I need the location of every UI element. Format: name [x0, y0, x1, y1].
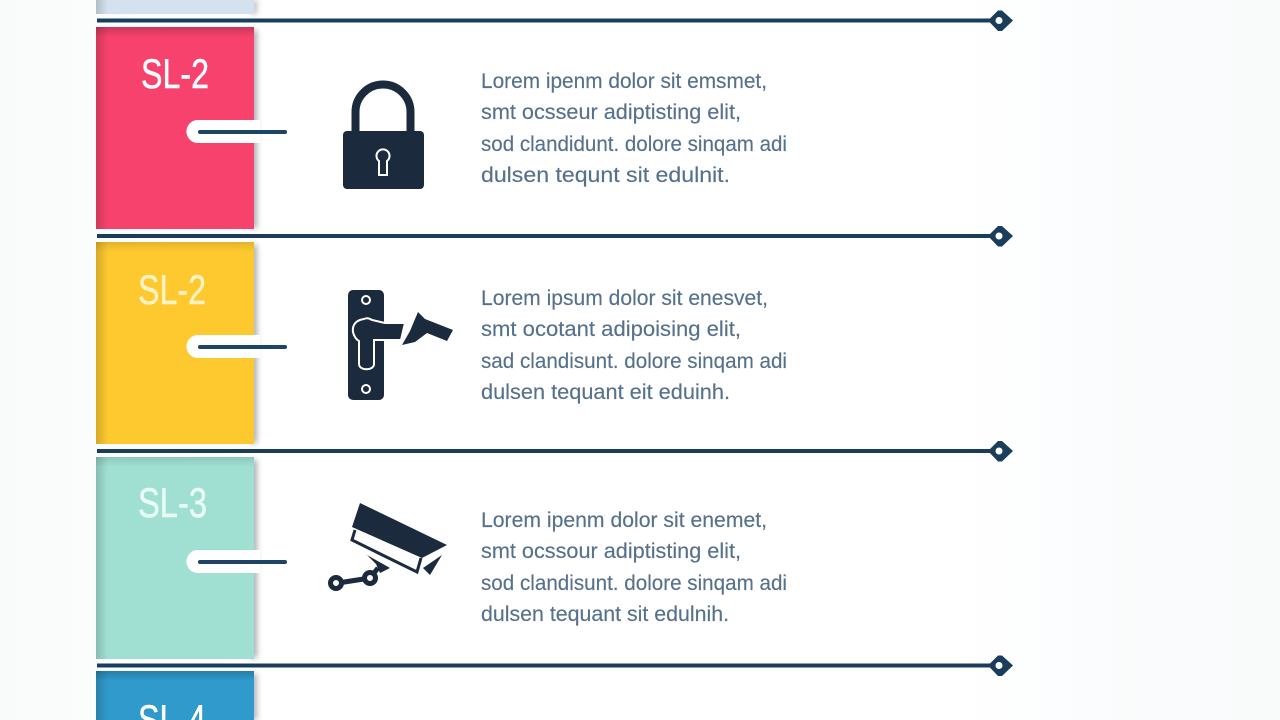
text block: level 2 yellow: dulsen tequant eit eduinh.	[481, 380, 730, 404]
text block: level 2 yellow: smt ocotant adipoising elit,	[481, 317, 741, 341]
panel: SL-2 yellow	[96, 242, 287, 444]
label: SL-2: SL-2	[138, 266, 206, 313]
arrow: divider 2	[97, 226, 1013, 246]
text block: level 2 yellow	[481, 286, 787, 404]
text block: level 2 red: Lorem ipenm dolor sit emsmet,	[481, 69, 767, 93]
arrow: divider 4	[97, 656, 1013, 676]
icon: security camera	[330, 503, 447, 588]
connector	[198, 345, 287, 349]
label: SL-2: SL-2	[141, 50, 209, 97]
text block: level 3: Lorem ipenm dolor sit enemet,	[481, 508, 767, 532]
label: SL-3: SL-3	[138, 479, 207, 526]
text block: level 3	[481, 508, 787, 626]
text block: level 3: dulsen tequant sit edulnih.	[481, 602, 729, 626]
icon: padlock	[343, 84, 424, 189]
text block: level 2 red	[481, 69, 787, 187]
text block: level 2 red: smt ocsseur adiptisting elit,	[481, 100, 741, 124]
connector	[198, 130, 287, 134]
connector	[198, 560, 287, 564]
text block: level 2 yellow: sad clandisunt. dolore sinqam adi	[481, 349, 787, 373]
panel: SL-4 blue	[96, 671, 257, 720]
panel: SL-3 teal	[96, 457, 287, 659]
text block: level 3: sod clandisunt. dolore sinqam adi	[481, 571, 787, 595]
arrow: divider 1	[97, 10, 1013, 31]
text block: level 3: smt ocssour adiptisting elit,	[481, 539, 741, 563]
arrow: divider 3	[97, 441, 1013, 462]
text block: level 2 red: dulsen tequnt sit edulnit.	[481, 163, 730, 187]
panel: top partial level	[96, 0, 257, 14]
panel: SL-2 red	[96, 27, 287, 229]
text block: level 2 yellow: Lorem ipsum dolor sit enesvet,	[481, 286, 768, 310]
icon: door handle	[348, 290, 453, 400]
text block: level 2 red: sod clandidunt. dolore sinqam adi	[481, 132, 787, 156]
